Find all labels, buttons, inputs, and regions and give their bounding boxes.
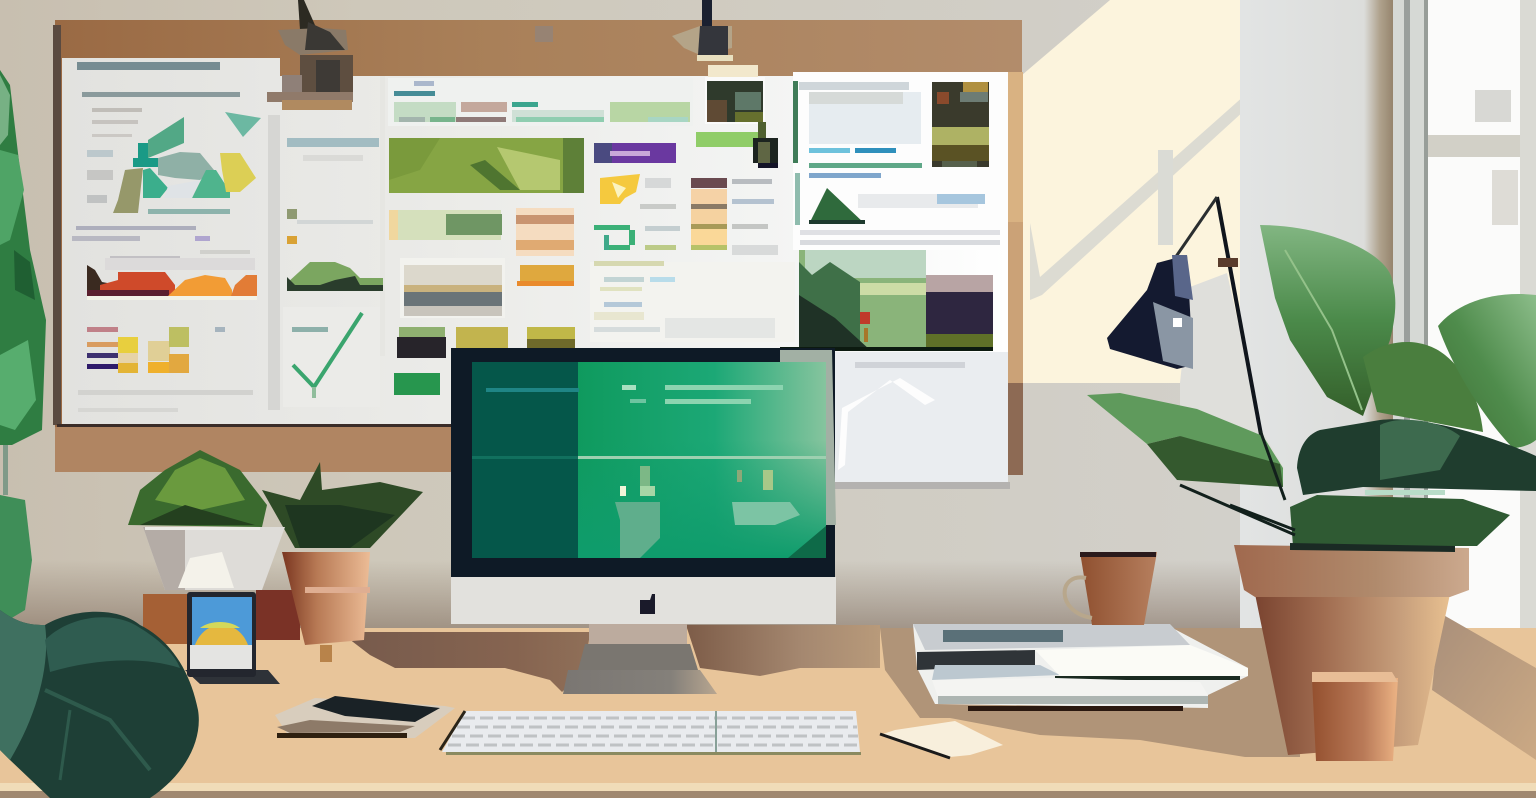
card: sticky icon list <box>594 174 680 250</box>
lamp wall shadow <box>1180 273 1285 470</box>
leaf: mid right <box>1363 342 1483 432</box>
window sill shadow <box>1432 613 1536 760</box>
leaf: left upper <box>1087 393 1283 487</box>
monitor body <box>451 348 835 578</box>
pinned photo <box>696 65 778 168</box>
plant stems <box>1180 430 1295 535</box>
plant: left desk grass <box>128 450 267 527</box>
coffee mug <box>1065 552 1157 625</box>
leaf: top centre <box>1260 225 1395 416</box>
chart: striped bars <box>87 327 225 373</box>
leaf: dark centre <box>1297 419 1536 495</box>
sheet behind monitor <box>832 352 1010 489</box>
window <box>1393 0 1536 650</box>
chart: radial segments <box>113 112 261 214</box>
striped swatches <box>516 208 574 286</box>
card: text column <box>287 138 383 291</box>
desk shadow under books <box>880 628 1300 757</box>
purple label <box>594 143 676 163</box>
desk shadow under monitor right <box>686 625 880 676</box>
desk <box>0 628 1536 798</box>
text card lower centre <box>590 261 795 342</box>
leaf: bottom <box>1290 495 1510 546</box>
clip: hanging pin right <box>672 0 733 61</box>
photo: green mountains <box>780 250 993 351</box>
plant: dark spiky desk plant <box>262 462 423 548</box>
photo: leaves <box>389 138 584 193</box>
screen left pane <box>472 362 578 558</box>
notebook <box>275 696 455 738</box>
leaf: left lower <box>1147 436 1283 487</box>
clip: hanging pin left <box>267 0 353 110</box>
chart: area stack <box>87 258 257 300</box>
panel: right column <box>793 72 1008 250</box>
monitor stand <box>563 622 717 694</box>
plant: tall left edge <box>0 70 46 625</box>
pot: terracotta <box>282 552 370 662</box>
wall background <box>0 0 1240 660</box>
glare at top right of bezel <box>780 350 836 525</box>
pinboard <box>53 20 1023 489</box>
strip chart: top <box>388 78 693 126</box>
mouse <box>880 721 1003 758</box>
blocks: lower swatches <box>394 327 575 395</box>
screen right pane <box>578 362 826 558</box>
photo: landscape card <box>400 258 505 318</box>
leaf: far right <box>1438 294 1536 448</box>
pot: brown block behind phone <box>143 590 300 644</box>
desk lamp <box>1107 197 1262 440</box>
plant: big leaf bottom left <box>0 610 199 798</box>
photo: dark trees top right <box>932 82 989 167</box>
desk shadow under monitor left <box>340 632 590 692</box>
monitor chin <box>451 577 836 624</box>
card: check mark <box>283 307 380 407</box>
monitor <box>451 348 836 694</box>
swatch card: green <box>389 210 502 240</box>
pot: large terracotta <box>1234 543 1469 755</box>
right wall <box>1240 0 1395 640</box>
phone <box>185 592 280 684</box>
pot: white planter <box>143 527 285 590</box>
keyboard <box>440 711 861 755</box>
monitor logo <box>640 594 655 614</box>
plant: large right plant <box>1087 225 1536 546</box>
stack of books and laptop <box>913 624 1248 711</box>
small terracotta cup <box>1312 672 1398 761</box>
sunlight patch on wall <box>1022 0 1245 383</box>
screen content <box>472 385 826 558</box>
panel: main wall chart sheet <box>57 58 1008 427</box>
striped column chart <box>691 178 778 255</box>
